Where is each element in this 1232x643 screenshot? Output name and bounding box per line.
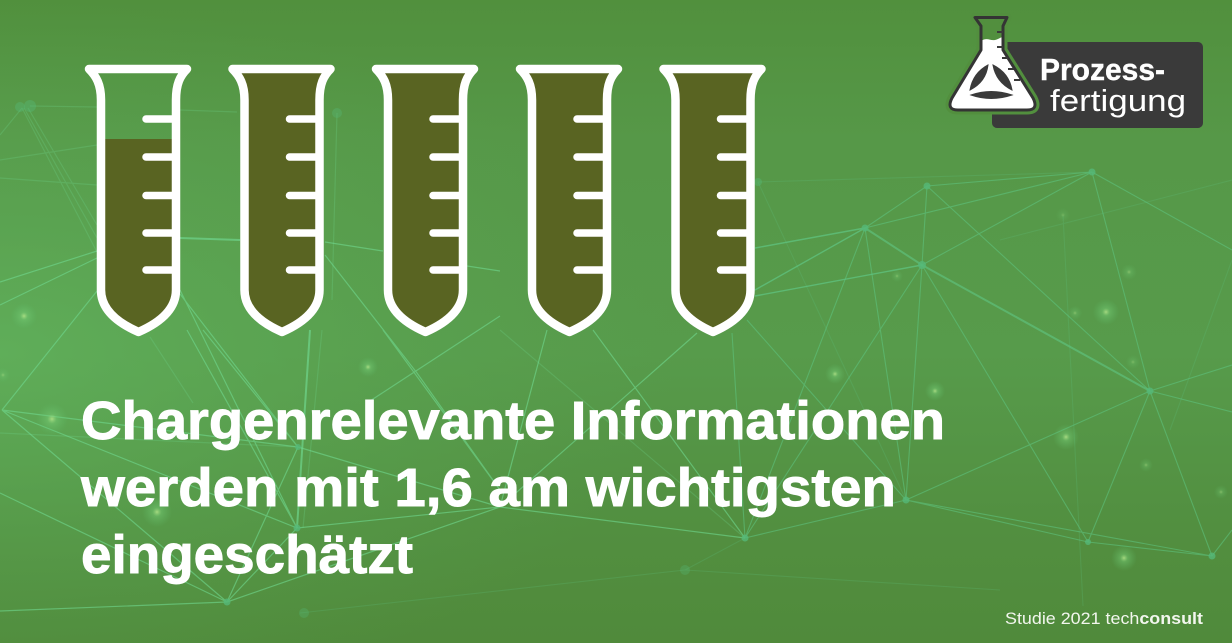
network nodes [15, 100, 1216, 618]
headline: eingeschätzt [81, 525, 413, 585]
headline: Chargenrelevante Informationen [81, 391, 945, 451]
test tube 2: full [232, 69, 330, 332]
network pattern: left side [0, 106, 745, 611]
badge background [992, 42, 1203, 128]
test tube 4: full [520, 69, 618, 332]
glowing particles [0, 208, 1228, 571]
badge: Prozessfertigung [950, 18, 1203, 128]
headline: werden mit 1,6 am wichtigsten [80, 458, 896, 518]
badge text: Prozess- [1040, 52, 1165, 87]
network pattern: right side [300, 172, 1232, 613]
icon: flask [950, 18, 1035, 110]
headline [80, 391, 945, 585]
badge: Prozessfertigung: fertigung [1050, 83, 1186, 118]
source line: Studie 2021 tech consult [1005, 609, 1203, 628]
test tube 1: partly filled [89, 69, 187, 332]
test tube 3: full [376, 69, 474, 332]
test tube 5: full [664, 69, 762, 332]
